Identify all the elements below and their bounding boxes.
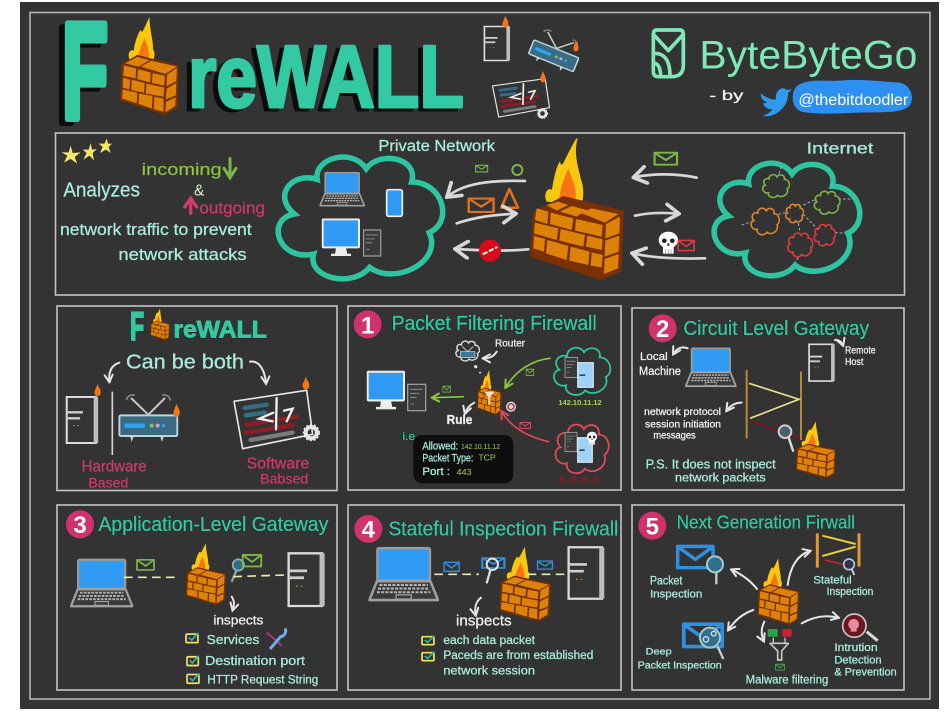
text: remote host: Remote xyxy=(845,345,876,356)
icon: laptop xyxy=(369,548,438,600)
icon: packet inspection xyxy=(678,546,723,584)
icon: skull xyxy=(659,232,678,254)
arrow: allowed packet xyxy=(432,394,463,400)
icon: laptop xyxy=(320,173,364,206)
arrow: malware xyxy=(762,622,764,641)
text: session messages: messages xyxy=(653,430,696,441)
icon: malware funnel xyxy=(768,629,792,670)
icon: server xyxy=(289,553,322,606)
item: established session: network session xyxy=(443,663,535,677)
badge 4: 4 xyxy=(362,517,376,544)
rule box: Packet Type: xyxy=(422,453,473,465)
icon: orange warning triangle xyxy=(501,189,518,208)
badge 5: 5 xyxy=(646,513,659,540)
arrow: top left xyxy=(447,181,525,197)
badge 1 xyxy=(354,310,382,339)
handle badge xyxy=(793,80,912,114)
text: hardware based xyxy=(82,459,147,490)
text: stateful inspection: Stateful xyxy=(813,574,852,586)
panel 2: circuit level gateway xyxy=(632,308,904,490)
icon: envelope xyxy=(443,386,451,392)
text: intrusion detection: Detection xyxy=(834,654,882,666)
firewall xyxy=(499,547,551,622)
text: intrusion detection xyxy=(834,642,897,679)
icon: inspected envelope xyxy=(482,558,504,568)
icon: router thought bubble xyxy=(456,341,481,374)
arrow: to hardware xyxy=(109,363,119,382)
arrow: packet inspection xyxy=(732,570,757,589)
title: Firewall: F xyxy=(56,0,102,151)
text: session messages xyxy=(644,407,721,441)
text: note: P.S. It does not inspect xyxy=(646,456,776,471)
text: ampersand: & xyxy=(194,183,204,200)
dashed link left xyxy=(434,572,479,577)
icon: gray server xyxy=(408,384,426,411)
dashed link right xyxy=(233,575,285,577)
text: incoming xyxy=(142,158,236,179)
firewall xyxy=(758,558,799,625)
arrow: inspects xyxy=(475,598,481,615)
heading: firewall: reWALL xyxy=(173,316,267,343)
small clouds xyxy=(751,175,840,257)
text: network traffic to prevent: network traffic to prevent xyxy=(60,220,252,239)
text: note: network packets xyxy=(675,471,766,485)
heading: Packet Filtering Firewall xyxy=(392,312,597,335)
icon: small green envelope xyxy=(476,165,488,172)
text: intrusion detection: & Prevention xyxy=(834,667,897,679)
rule box: TCP xyxy=(478,452,496,462)
arrow: intrusion xyxy=(802,616,838,623)
icon: desktop monitor xyxy=(323,219,359,256)
dashed link left xyxy=(124,575,177,580)
text: internet: Internet xyxy=(807,140,874,157)
arrow: malicious incoming xyxy=(633,253,705,259)
panel 5: next generation firewall xyxy=(632,505,904,690)
text: packet inspection: Packet xyxy=(650,573,683,587)
text: private network: Private Network xyxy=(378,138,495,155)
firewall xyxy=(477,370,501,415)
arrow: outgoing to internet xyxy=(635,213,678,216)
heading: Stateful Inspection Firewall xyxy=(388,518,618,541)
icon: deep packet inspection xyxy=(684,624,723,659)
icon: ByteByteGo logo xyxy=(653,30,683,77)
text: inspects: inspects xyxy=(213,612,264,627)
icon: envelope inspected xyxy=(243,555,261,566)
badge 3 xyxy=(66,510,94,539)
panel 4: stateful inspection firewall xyxy=(348,505,621,690)
text: analyzes: Analyzes xyxy=(63,179,140,202)
text: deep packet inspection: Deep xyxy=(646,646,672,656)
text: packet inspection xyxy=(650,573,702,600)
arrow: router xyxy=(483,352,497,358)
text: deep packet inspection: Packet Inspection xyxy=(638,660,722,671)
text: incoming: incoming xyxy=(142,160,222,179)
text: local machine xyxy=(639,351,681,378)
item: established session: Paceds are from established xyxy=(443,648,593,662)
by label: - by xyxy=(709,87,743,103)
arrow: internet in top xyxy=(634,174,697,178)
title: Firewall: reWALL xyxy=(183,30,459,129)
arrow: messages xyxy=(727,403,742,411)
panel: firewall overview hero xyxy=(56,133,904,295)
text: software based: Babsed xyxy=(260,470,308,486)
text: session messages: session initiation xyxy=(645,419,721,430)
icon: green envelope xyxy=(655,153,677,165)
text: remote host xyxy=(845,345,876,368)
panel: can be both xyxy=(57,305,337,490)
text: router: Router xyxy=(495,339,526,350)
arrow: local machine xyxy=(673,347,688,354)
icon: phone xyxy=(387,190,402,216)
text: outgoing: outgoing xyxy=(199,198,265,217)
icon: intrusion magnifier xyxy=(843,614,878,641)
icon: gray server xyxy=(364,230,381,256)
text: software based xyxy=(247,455,309,486)
cloud: malicious source xyxy=(555,424,609,485)
cloud: trusted source xyxy=(554,348,610,407)
ByteByteGo branding xyxy=(653,30,917,116)
text: network attacks: network attacks xyxy=(118,245,247,264)
arrow: remote host xyxy=(835,340,843,345)
icon: code window xyxy=(234,377,319,449)
icon: server xyxy=(67,384,101,443)
heading: Application-Level Gateway xyxy=(98,513,329,536)
rule box: 142.10.11.12 xyxy=(461,442,500,451)
item: http request string: HTTP Request String xyxy=(207,672,318,686)
heading: Circuit Level Gateway xyxy=(683,317,870,340)
heading: Next Generation Firwall xyxy=(677,511,855,532)
text: stateful inspection xyxy=(813,574,873,598)
icon: laptop xyxy=(71,560,132,606)
arrow: stateful xyxy=(788,551,810,585)
item: destination port: Destination port xyxy=(205,653,305,668)
badge 1: 1 xyxy=(361,312,374,339)
icon: stateful diagram xyxy=(817,533,859,575)
icon: server xyxy=(569,547,602,599)
cloud: internet xyxy=(714,163,860,276)
icon: stars xyxy=(61,138,112,164)
text: hardware based: Based xyxy=(88,474,128,490)
title: Firewall: reWALL xyxy=(188,27,464,126)
icon: magnifier xyxy=(232,559,244,582)
rule box xyxy=(413,435,513,483)
icon: laptop xyxy=(686,348,736,386)
text: inspects: inspects xyxy=(456,614,512,630)
icon: red blocked sign xyxy=(479,240,501,262)
icon: blue envelope xyxy=(537,561,552,569)
icon: twitter bird xyxy=(761,88,792,116)
icon: magnifier xyxy=(487,559,498,583)
badge 3: 3 xyxy=(73,512,87,539)
panel 1: packet filtering firewall xyxy=(348,306,621,490)
icon: orange envelope xyxy=(469,199,494,212)
rule box: Port : xyxy=(422,466,450,478)
icon: envelope xyxy=(137,560,154,570)
arrow: inspects xyxy=(232,597,234,610)
text: can be both: Can be both xyxy=(126,350,244,373)
heading: firewall: F xyxy=(130,305,144,349)
text: software based: Software xyxy=(247,455,309,472)
heading: firewall xyxy=(130,305,267,349)
text: stateful inspection: Inspection xyxy=(827,586,873,598)
firewall xyxy=(530,138,624,280)
arrow: deep packet xyxy=(728,610,753,630)
rule box: Allowed: xyxy=(422,440,458,452)
rule box: 443 xyxy=(457,467,472,477)
badge 5 xyxy=(638,512,666,540)
icon: router xyxy=(119,395,180,442)
arrow: to software xyxy=(250,362,266,383)
icon: monitor xyxy=(368,372,404,409)
arrow: rejected packet xyxy=(502,412,548,442)
text: remote host: Host xyxy=(845,357,864,368)
arrow: trusted packet xyxy=(506,358,550,387)
text: note xyxy=(646,456,776,485)
text: deep packet inspection xyxy=(638,646,722,671)
item: services: Services xyxy=(207,632,260,647)
text: intrusion detection: Intrution xyxy=(834,642,878,654)
divider line xyxy=(110,392,115,455)
icon: green envelope xyxy=(526,369,534,375)
dashed link right xyxy=(528,572,565,577)
text: i.e: i.e xyxy=(402,431,415,443)
handle badge: @thebitdoodler xyxy=(798,92,908,109)
text: rule: Rule xyxy=(447,412,472,427)
arrow: rule xyxy=(465,403,474,413)
firewall xyxy=(186,543,226,605)
text: packet inspection: Inspection xyxy=(650,588,702,600)
icon: small green circle xyxy=(512,165,522,175)
icon: magnifier xyxy=(779,425,793,452)
item: services xyxy=(186,632,260,647)
icon: red envelope xyxy=(520,423,530,428)
badge 4 xyxy=(354,515,382,544)
cloud: private network xyxy=(278,157,443,279)
icon: red envelope xyxy=(678,240,694,251)
session diagram xyxy=(747,370,801,440)
icon: server xyxy=(809,344,833,381)
text: hardware based: Hardware xyxy=(82,459,147,476)
icon: blocked xyxy=(506,402,516,412)
panel 3: application-level gateway xyxy=(57,505,337,690)
icon: wrench xyxy=(267,628,286,649)
header icons: server, router, code xyxy=(484,16,584,118)
icon: blue envelope xyxy=(444,562,459,571)
firewall xyxy=(796,422,836,478)
badge 2: 2 xyxy=(656,316,669,343)
arrow: bottom left xyxy=(456,249,528,251)
brand name: ByteByteGo xyxy=(699,33,917,77)
text: malware filtering: Malware filtering xyxy=(746,672,828,686)
cloud: trusted source: 142.10.11.12 xyxy=(558,398,602,407)
item: each data packet: each data packet xyxy=(443,633,536,647)
text: local machine: Local xyxy=(640,351,668,363)
item: established session xyxy=(422,648,593,677)
title: Firewall xyxy=(56,0,464,151)
cloud: malicious source: 8.8.8.8 xyxy=(558,476,601,485)
badge 2 xyxy=(649,314,677,343)
text: session messages: network protocol xyxy=(644,407,721,418)
text: local machine: Machine xyxy=(639,364,681,378)
arrow: middle right xyxy=(457,214,515,223)
network links xyxy=(742,167,853,262)
